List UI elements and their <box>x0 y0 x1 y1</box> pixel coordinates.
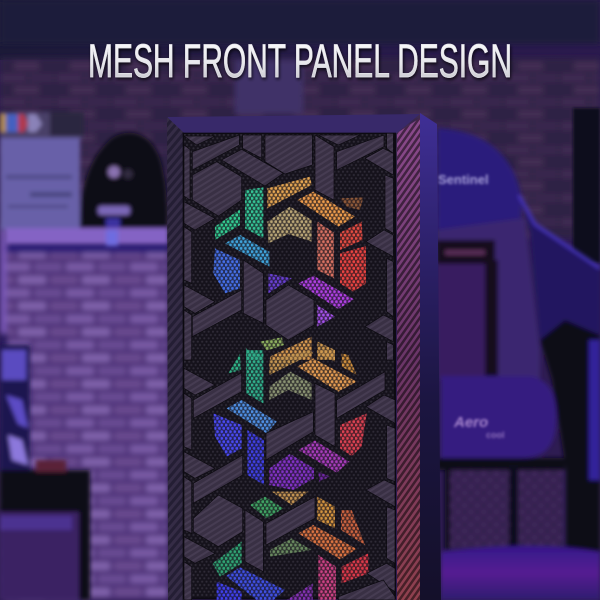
case top bevel <box>167 114 420 133</box>
chair logo sub text: cool <box>486 430 505 440</box>
back wall upper bricks <box>0 0 600 238</box>
PC case <box>167 113 441 600</box>
carbon panels upper <box>184 133 393 360</box>
left brick wall <box>0 228 168 600</box>
headrest logo: Sentinel <box>438 172 489 187</box>
monitor on right wall <box>573 108 600 263</box>
right carbon strip <box>397 118 420 600</box>
RGB fan glow lower <box>213 350 368 600</box>
carbon panels lower <box>184 368 395 600</box>
RGB fan glow upper <box>213 177 366 360</box>
chair logo: Aero <box>453 414 488 431</box>
left carbon strip <box>167 117 184 600</box>
case side face <box>420 113 441 600</box>
shelf with poster and helmet <box>0 112 168 246</box>
front panel mesh <box>183 133 396 599</box>
gaming chair <box>437 128 600 600</box>
figure and furniture bottom left <box>0 345 90 600</box>
